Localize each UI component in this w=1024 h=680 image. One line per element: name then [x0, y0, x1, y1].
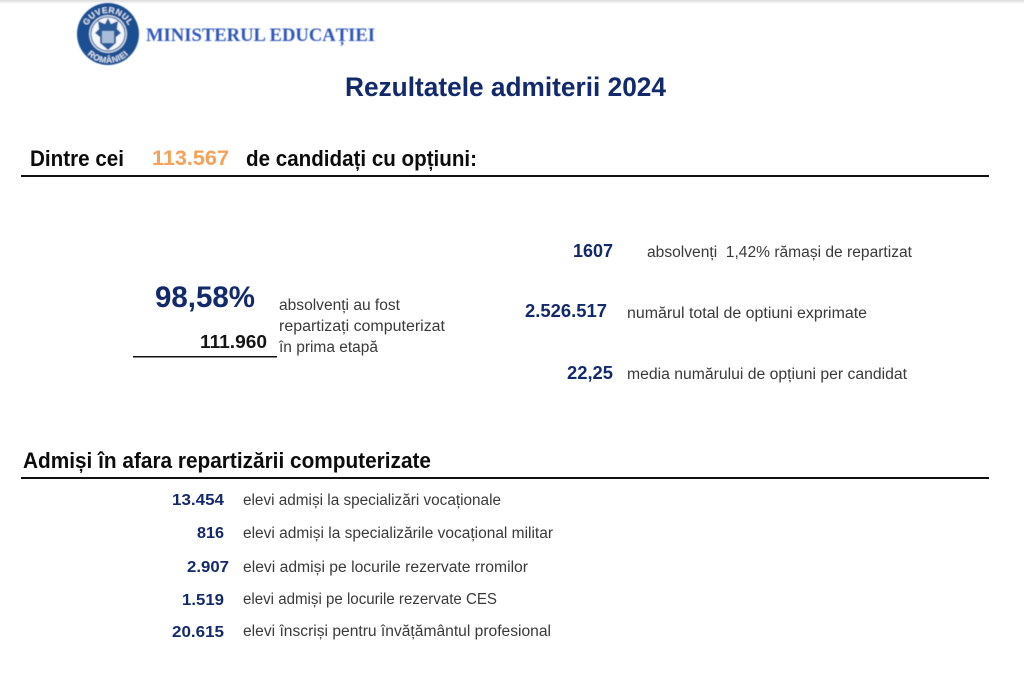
description: absolvenți au fost [279, 297, 401, 314]
row: vocational education: elevi înscriși pentru învățământul profesional [243, 623, 551, 640]
list: admitted students [172, 492, 553, 641]
row: military: 816 [197, 525, 224, 542]
description: repartizați computerizat [279, 318, 446, 335]
stat: average options [567, 363, 908, 383]
title: Rezultatele admiterii 2024 [345, 72, 666, 102]
icon: government seal [76, 2, 140, 66]
stat: total options [525, 301, 867, 322]
stat: share placed [133, 281, 446, 358]
stat: remaining graduates [573, 241, 913, 261]
icon: government seal: ROMÂNIEI [87, 50, 129, 64]
stat: remaining graduates: 1607 [573, 241, 613, 261]
description: în prima etapă [278, 339, 378, 356]
percentage: 98,58% [155, 281, 255, 314]
description [278, 297, 446, 356]
row: vocational education: 20.615 [172, 624, 224, 641]
row: CES: elevi admiși pe locurile rezervate CES [243, 591, 497, 608]
row: rroma: elevi admiși pe locurile rezervate rromilor [243, 559, 528, 576]
stat: total options: numărul total de optiuni exprimate [627, 305, 867, 322]
row: vocational: elevi admiși la specializări vocaționale [243, 492, 501, 509]
logo: Ministerul Educației [76, 2, 375, 66]
logo wordmark: MINISTERUL EDUCAȚIEI [146, 26, 375, 46]
stat: remaining graduates: absolvenți 1,42% rămași de repartizat [647, 244, 913, 261]
stat: total options: 2.526.517 [525, 301, 607, 321]
row: rroma: 2.907 [187, 559, 229, 576]
row: vocational: 13.454 [172, 492, 224, 509]
row: CES: 1.519 [182, 592, 224, 609]
icon: government seal: GUVERNUL [82, 6, 132, 26]
stat: average options: 22,25 [567, 363, 613, 383]
heading: admitted outside: Admiși în afara repartizării computerizate [23, 448, 431, 473]
stat: average options: media numărului de opțiuni per candidat [627, 366, 908, 383]
heading: candidates: Dintre cei [30, 146, 124, 171]
row: military: elevi admiși la specializările vocațional militar [243, 525, 553, 542]
heading: candidates [30, 146, 477, 171]
heading: candidates: de candidați cu opțiuni: [246, 146, 477, 171]
heading: candidates: 113.567 [152, 147, 229, 170]
count placed: 111.960 [200, 332, 267, 352]
